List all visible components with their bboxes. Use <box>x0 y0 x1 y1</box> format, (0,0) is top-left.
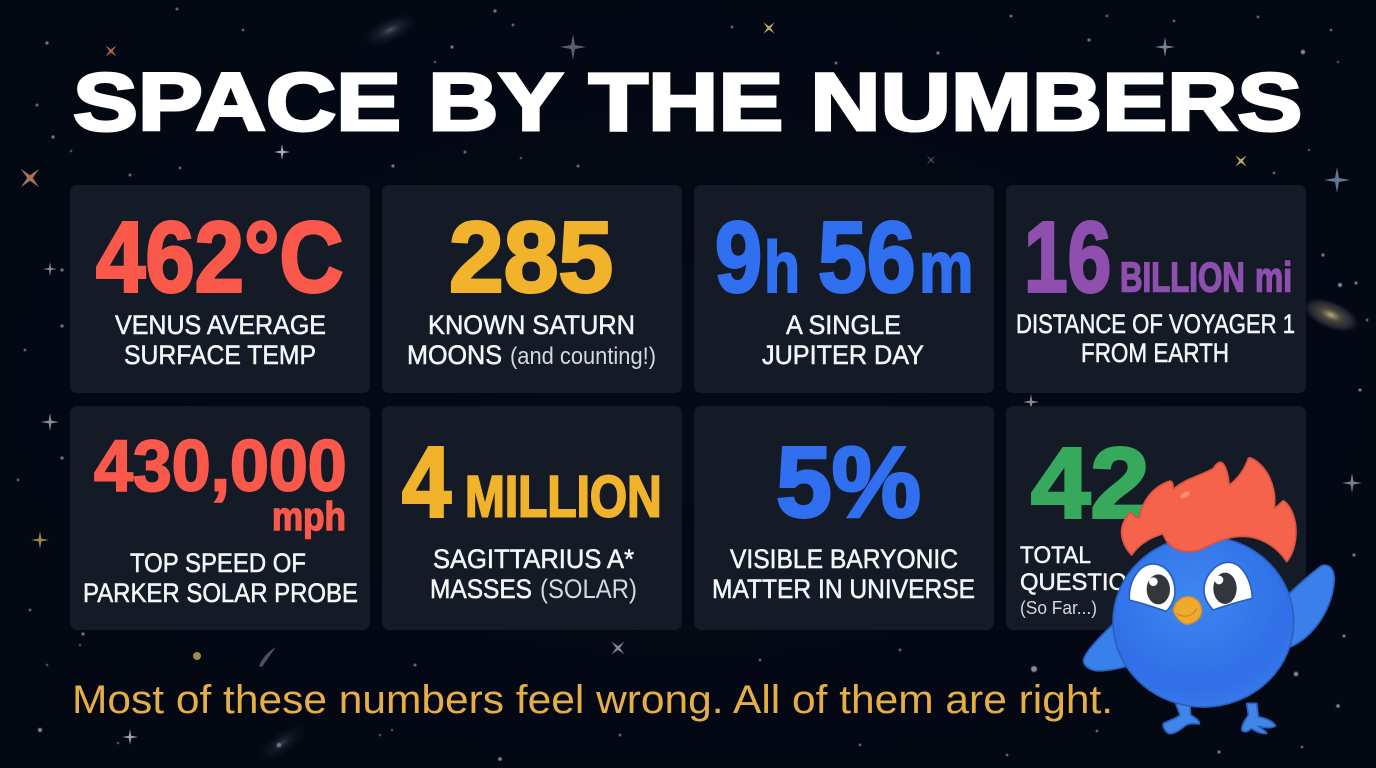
stat: 9h 56m: h <box>764 226 800 307</box>
stat: 42: 42 <box>1031 427 1150 539</box>
label: distance of Voyager 1 from Earth <box>1016 309 1295 368</box>
label: top speed of Parker Solar Probe: TOP SPEED OF <box>130 548 306 578</box>
panel: Venus temperature <box>70 185 370 393</box>
mascot: blue bird with red hair <box>1083 458 1334 734</box>
stat: 16 billion mi: mi <box>1255 253 1292 301</box>
panel: Saturn moons <box>382 185 682 393</box>
stat: 430,000 mph: 430,000 <box>94 427 347 507</box>
label: Venus average surface temp: SURFACE TEMP <box>124 340 316 370</box>
label: Venus average surface temp <box>115 310 326 370</box>
icon: left eye <box>1129 564 1175 611</box>
label: Sagittarius A* masses: (SOLAR) <box>540 574 637 604</box>
label: known Saturn moons <box>407 310 656 370</box>
label: Sagittarius A* masses: MASSES <box>430 574 532 604</box>
stat: 9h 56m: 56 <box>818 201 916 313</box>
label: visible baryonic matter <box>712 544 975 604</box>
tagline: Most of these numbers feel wrong. All of them are right. <box>72 677 1113 722</box>
label: known Saturn moons: (and counting!) <box>510 343 656 370</box>
label: visible baryonic matter: VISIBLE BARYONIC <box>730 544 958 574</box>
label: top speed of Parker Solar Probe <box>83 548 358 608</box>
title: SPACE BY THE NUMBERS <box>73 57 1302 148</box>
icon: left foot <box>1163 702 1199 734</box>
panel: Jupiter day <box>694 185 994 393</box>
stat: 9h 56m <box>715 201 973 313</box>
icon: right eye <box>1204 562 1252 610</box>
label: total questions so far: QUESTIONS <box>1020 569 1160 596</box>
label: known Saturn moons: MOONS <box>407 340 502 370</box>
panel: Parker Solar Probe <box>70 406 370 630</box>
label: top speed of Parker Solar Probe: PARKER SOLAR PROBE <box>83 578 358 608</box>
stat: 4 million <box>402 426 662 538</box>
stat: 5%: 5% <box>776 427 921 538</box>
icon: hair <box>1122 458 1296 562</box>
label: visible baryonic matter: MATTER IN UNIVERSE <box>712 574 975 604</box>
label: total questions so far: (So Far...) <box>1020 598 1097 618</box>
stat: 4 million: MILLION <box>465 465 662 530</box>
icon: left wing <box>1083 624 1128 671</box>
label: distance of Voyager 1 from Earth: DISTANCE OF VOYAGER 1 <box>1016 309 1295 339</box>
stat: 462°C: 462°C <box>96 202 343 314</box>
panel: Sagittarius A* <box>382 406 682 630</box>
stat: 430,000 mph: mph <box>272 494 346 539</box>
icon: right foot <box>1242 703 1276 733</box>
stat: 16 billion mi <box>1024 203 1292 314</box>
label: distance of Voyager 1 from Earth: FROM EARTH <box>1081 338 1229 368</box>
stat: 9h 56m: 9 <box>715 201 762 313</box>
stat: 285: 285 <box>449 202 613 314</box>
stat: 4 million: 4 <box>402 426 451 538</box>
stat: 16 billion mi: BILLION <box>1120 254 1245 301</box>
panel: total questions <box>1006 406 1306 630</box>
label: a single Jupiter day: A SINGLE <box>786 310 901 340</box>
label: Venus average surface temp: VENUS AVERAGE <box>115 310 326 340</box>
panel: Voyager distance <box>1006 185 1306 393</box>
label: total questions so far: TOTAL <box>1020 542 1091 569</box>
label: a single Jupiter day: JUPITER DAY <box>762 340 924 370</box>
icon: body <box>1113 536 1294 707</box>
icon: right wing <box>1273 565 1334 651</box>
label: Sagittarius A* masses <box>430 544 637 604</box>
label: known Saturn moons: KNOWN SATURN <box>428 310 635 340</box>
label: total questions so far <box>1020 542 1160 618</box>
panel: baryonic matter <box>694 406 994 630</box>
label: Sagittarius A* masses: SAGITTARIUS A* <box>433 544 634 574</box>
icon: beak <box>1173 597 1202 624</box>
label: a single Jupiter day <box>762 310 924 370</box>
stat: 16 billion mi: 16 <box>1024 203 1111 314</box>
stat: 9h 56m: m <box>919 228 973 308</box>
